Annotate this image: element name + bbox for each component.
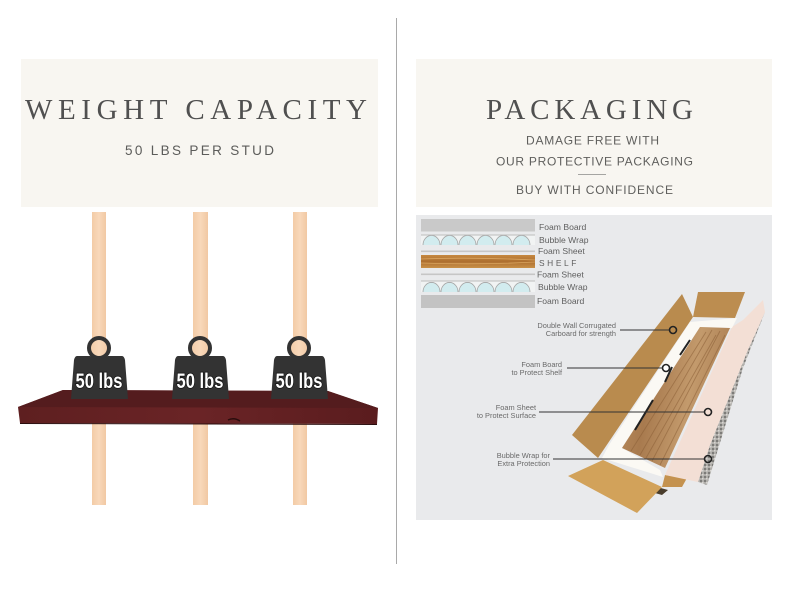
callout: foam sheet: Foam Sheet	[496, 403, 536, 412]
text: damage free: DAMAGE FREE WITH	[526, 134, 659, 148]
callout: bubble wrap	[497, 451, 712, 468]
layer: bubble wrap bottom	[421, 281, 588, 292]
layer: foam sheet top: Foam Sheet	[538, 246, 585, 256]
callout: corrugated cardboard: Carboard for strength	[546, 329, 616, 338]
callout: foam board: Foam Board	[521, 360, 562, 369]
subheading: 50 lbs per stud: 50 LBS PER STUD	[125, 143, 274, 158]
callout: foam sheet: to Protect Surface	[477, 411, 536, 420]
panel: weight capacity header	[21, 59, 378, 207]
layer: bubble wrap bottom: Bubble Wrap	[538, 282, 588, 292]
weight 2: 50 lbs	[176, 370, 224, 393]
weight 3: 50 lbs	[276, 370, 322, 393]
callout: foam sheet	[477, 403, 712, 420]
layer: foam board top	[421, 219, 587, 232]
layer: foam board bottom	[421, 295, 585, 308]
stud 2	[193, 212, 208, 505]
panel: packaging diagram	[416, 215, 772, 520]
heading: weight capacity: WEIGHT CAPACITY	[25, 94, 367, 126]
panel: packaging header	[416, 59, 772, 207]
layer: foam board top: Foam Board	[539, 222, 587, 232]
stud 1	[92, 212, 106, 505]
weight 2	[172, 338, 229, 399]
callout: bubble wrap: Extra Protection	[497, 459, 550, 468]
layer: foam sheet bottom: Foam Sheet	[537, 270, 584, 280]
illustration: shelf on studs with weights	[18, 212, 378, 505]
weight 1	[71, 338, 128, 399]
stud 3	[293, 212, 307, 505]
text: buy with confidence: BUY WITH CONFIDENCE	[516, 183, 673, 197]
heading: packaging: PACKAGING	[486, 94, 693, 126]
weight 3	[271, 338, 328, 399]
illustration: open shipping box	[568, 292, 765, 513]
layer: shelf: SHELF	[539, 258, 579, 268]
layer: bubble wrap top	[421, 235, 589, 245]
layer: shelf	[421, 255, 579, 268]
weight 1: 50 lbs	[76, 370, 122, 393]
callout: foam board	[511, 360, 670, 377]
callout: foam board: to Protect Shelf	[511, 368, 563, 377]
callout: corrugated cardboard	[537, 321, 676, 338]
layer: bubble wrap top: Bubble Wrap	[539, 235, 589, 245]
callout: corrugated cardboard: Double Wall Corrugated	[537, 321, 616, 330]
callout: bubble wrap: Bubble Wrap for	[497, 451, 551, 460]
shelf	[18, 390, 378, 424]
layer: foam board bottom: Foam Board	[537, 296, 585, 306]
layer stack legend	[421, 219, 589, 308]
text: our protective packaging: OUR PROTECTIVE PACKAGING	[496, 154, 693, 168]
